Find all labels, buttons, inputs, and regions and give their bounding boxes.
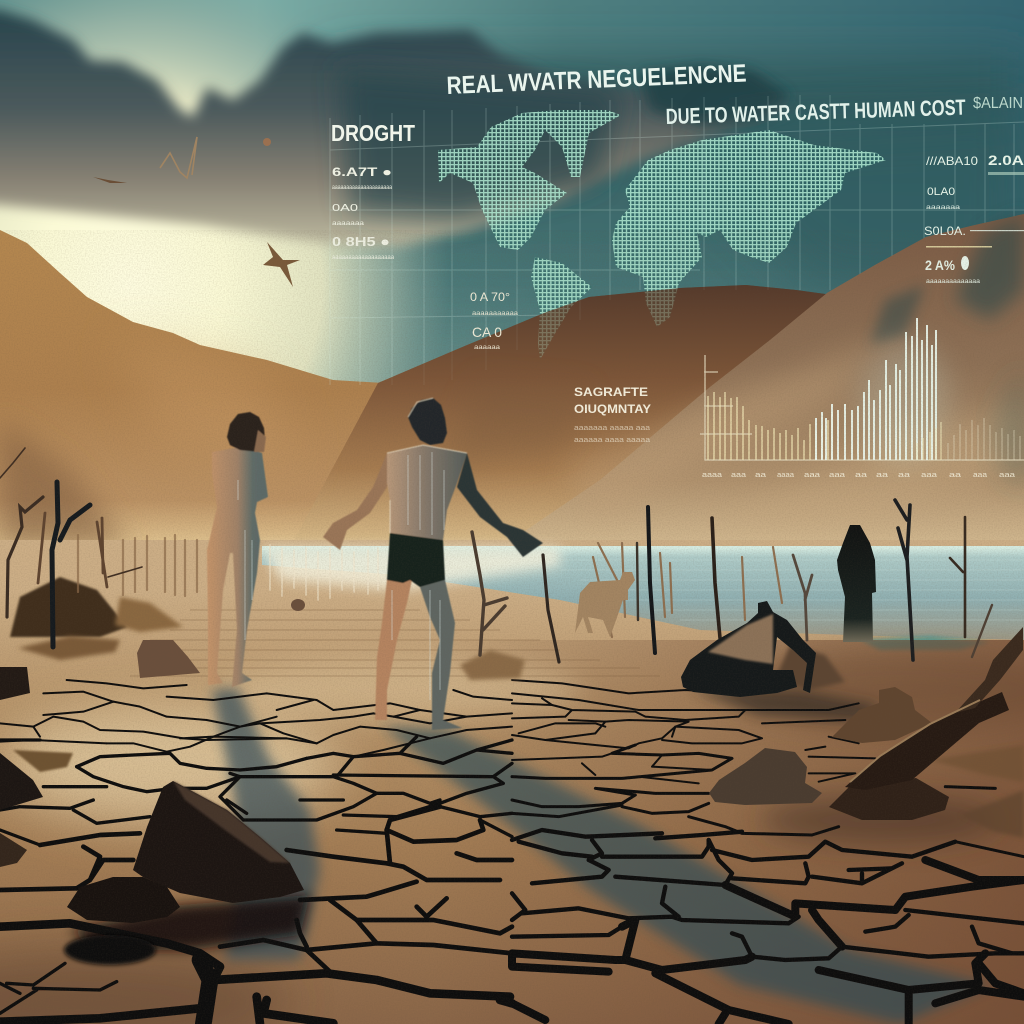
map: Americas: [438, 110, 621, 360]
chart bars bright: [816, 318, 936, 460]
crouching person: lit back: [708, 614, 773, 664]
rock: lower left edge: [0, 833, 27, 867]
chart caption: [574, 385, 651, 444]
left stats column: aaaaaaaaaaaaaaaaaaaaa: [332, 185, 393, 191]
left cracks: far rows: [0, 680, 512, 757]
water streaks on figures: [238, 452, 444, 700]
trees: centre slim: [543, 555, 559, 662]
sky background: [0, 0, 1024, 560]
mound: beside shrub: [115, 597, 183, 632]
trees: grey forked: [793, 555, 812, 640]
shadow: woman: [212, 688, 320, 960]
right cracks: near rows: [512, 830, 1024, 960]
trees: thin twig: [0, 448, 142, 577]
shadow: crouching person: [690, 690, 880, 722]
heading: drought: DROGHT: [331, 120, 415, 146]
left cracks: near rows: [0, 807, 512, 972]
shadow: foreground rocks: [70, 895, 310, 950]
right stats column: 0LA0: [927, 186, 955, 198]
right cracks: middle rows: [512, 745, 1024, 857]
right cracks: foreground: [512, 860, 1024, 1024]
left cracks: deep gash: [200, 960, 210, 1024]
cracked earth right half: [512, 680, 1024, 1024]
left stats column: 6.A7T ●: [332, 165, 392, 179]
shrub: left: [10, 577, 127, 637]
shadow: man: [382, 726, 990, 1024]
mountain shading: [0, 214, 1024, 548]
chart axes: [700, 355, 1024, 460]
dead trees: [0, 448, 992, 662]
left cracks: foreground: [0, 923, 512, 1024]
trees: centre forked: [472, 532, 507, 655]
right cracks: far rows: [512, 680, 875, 783]
chart caption: aaaaaaa aaaaa aaa: [574, 425, 650, 432]
mound: right of pool: [930, 745, 1024, 782]
trees: faded background stems: [78, 535, 197, 596]
bird: large: [263, 242, 300, 287]
cow: [575, 572, 635, 637]
lake ripples: [560, 560, 1024, 620]
centre stats: [470, 290, 519, 351]
trees: left dark: [52, 482, 90, 647]
log: lit edge: [850, 700, 980, 782]
cracked earth left half: [0, 680, 512, 1024]
figure shadows: [70, 688, 990, 1024]
woman: hand at face: [254, 430, 266, 452]
rock: left edge: [0, 753, 43, 810]
dashboard grid lines: [330, 95, 1024, 385]
right stats column: aaaaaaa: [926, 205, 961, 211]
dirt by crouching figure: [775, 645, 845, 690]
man: shorts: [387, 533, 445, 587]
chart bars tail: [917, 422, 941, 460]
right stats column: aaaaaaaaaaaaaa: [926, 279, 981, 285]
man: head: [408, 398, 447, 445]
ground tone overlays: [0, 640, 1024, 1024]
man: left arm: [323, 453, 387, 550]
woman: body: [207, 447, 268, 687]
chart bars faded right: [948, 418, 1020, 460]
rock: lit ridge: [173, 781, 290, 863]
log: mound: [829, 778, 949, 820]
chart tick labels: aa: [876, 472, 888, 479]
left stats column: [332, 165, 395, 261]
left cracks: middle rows: [0, 737, 512, 845]
storm clouds: [0, 8, 1024, 290]
right stats column: [924, 152, 1024, 285]
left stats column: 0A0: [332, 203, 359, 214]
trees: left branching: [7, 497, 43, 617]
man: [323, 398, 543, 730]
mound: right edge: [960, 790, 1024, 838]
rocks: [0, 599, 932, 965]
bird: flapping: [160, 137, 197, 178]
log: trunk: [845, 692, 1009, 790]
chart tick labels: [702, 472, 1015, 479]
left stats column: 0 8H5 ●: [332, 234, 390, 249]
centre stats: aaaaaaaaaaa: [472, 311, 519, 317]
right stats column: S0L0A.: [924, 224, 966, 238]
chart tick labels: aaa: [829, 472, 845, 479]
ground: [0, 540, 1024, 1024]
centre stats: 0 A 70°: [470, 290, 510, 304]
woman: head: [227, 412, 265, 452]
chart tick labels: aaa: [731, 472, 746, 479]
right stats column: ///ABA10: [926, 154, 978, 168]
far ground texture lines: [130, 610, 660, 676]
rock: pebble by shore: [291, 599, 305, 611]
crouching person: [681, 601, 816, 697]
bird: small: [263, 138, 271, 146]
trees: tan distant: [593, 543, 782, 637]
chart tick labels: aaa: [973, 472, 987, 479]
woman: [207, 412, 268, 687]
centre mountain: [290, 285, 900, 548]
chart tick labels: aaa: [921, 472, 937, 479]
rock: centre right: [709, 748, 822, 805]
chart tick labels: aa: [755, 472, 766, 479]
mound: under shrub: [18, 636, 120, 660]
right stats column: 2 A%: [925, 257, 955, 273]
rock: mound with boulder: [832, 687, 932, 743]
left stats column: aaaaaaa: [332, 221, 365, 227]
centre stats: aaaaaa: [474, 345, 501, 351]
dry shrubs and mounds: [10, 577, 1024, 838]
chart glow: [860, 340, 950, 460]
log: upper splinter: [955, 627, 1023, 713]
chart tick labels: aa: [898, 472, 910, 479]
bar chart: [700, 318, 1024, 479]
sand patch: left: [13, 750, 73, 772]
chart caption: SAGRAFTE: [574, 385, 648, 399]
man: right leg: [420, 580, 462, 730]
chart bars warm: [708, 392, 832, 460]
left mountain: [0, 230, 600, 548]
title: REAL WVATR NEGUELENCNE: [446, 59, 747, 100]
centre mountain veil: [290, 285, 900, 548]
birds: [93, 137, 300, 287]
left cracks: tile splits: [0, 963, 117, 1013]
man: rim light: [387, 398, 467, 533]
trees: right tall: [895, 500, 913, 660]
rock: shadow oval: [64, 935, 156, 965]
surface grain: [0, 230, 1024, 1024]
lake: [262, 546, 1024, 650]
rock: large foreground: [133, 781, 304, 903]
trees: pale shore stems: [270, 545, 378, 600]
trees: left brown: [38, 513, 107, 587]
man: torso: [387, 445, 467, 540]
chart tick labels: aaa: [804, 472, 820, 479]
left stats column: aaaaaaaaaaaaaaaaaaa: [332, 255, 395, 261]
crouching person: body: [681, 601, 816, 697]
man: right arm: [457, 453, 543, 557]
rock: low foreground: [67, 877, 180, 923]
broken log: [829, 627, 1023, 820]
right mountain: [500, 214, 1024, 548]
rock: left edge dark: [0, 667, 30, 700]
chart tick labels: aaa: [999, 472, 1015, 479]
chart caption: aaaaaa aaaa aaaaa: [574, 437, 650, 444]
chart tick labels: aaaa: [777, 472, 794, 479]
teal pool: [860, 636, 990, 650]
chart caption: OIUQMNTAY: [574, 402, 651, 416]
robed figure: [837, 525, 876, 642]
map: Eurasia and Africa: [612, 130, 886, 327]
centre stats: CA 0: [472, 324, 502, 340]
chart tick labels: aa: [949, 472, 961, 479]
left water glare: [262, 548, 560, 590]
trees: dark upright: [648, 507, 655, 653]
man: left leg: [375, 580, 412, 720]
chart tick labels: aa: [855, 472, 867, 479]
trees: right thin: [950, 517, 965, 637]
right stats column: 2.0A: [988, 152, 1024, 168]
shrub: behind man: [460, 650, 525, 680]
right mountain veil: [500, 214, 1024, 548]
chart tick labels: aaaa: [702, 472, 722, 479]
bird: far left: [93, 177, 127, 183]
world map: [438, 110, 886, 360]
rock: far left: [137, 640, 200, 678]
